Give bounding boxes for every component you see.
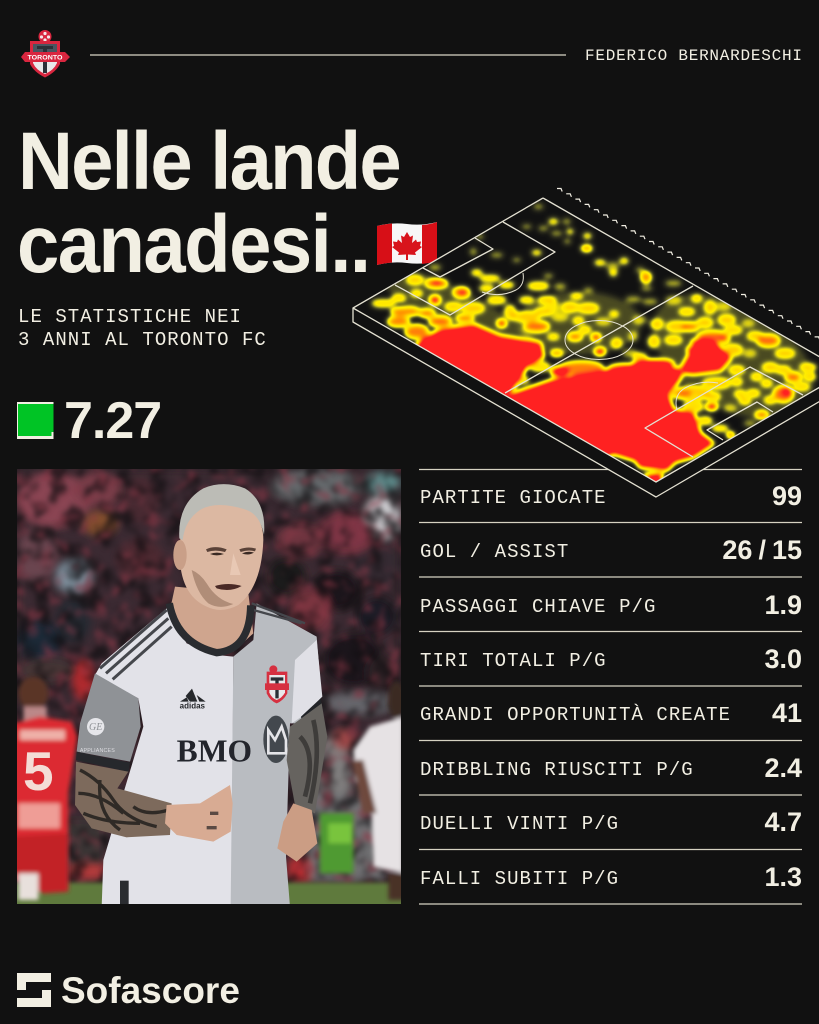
photo: background player in red — [13, 677, 77, 900]
player photo — [13, 467, 407, 909]
stat row: tiri totali: 3.0 — [764, 644, 802, 674]
subtitle: 3 ANNI AL TORONTO FC — [18, 329, 267, 351]
stat row: partite giocate: PARTITE GIOCATE — [420, 487, 607, 509]
title: canadesi.. — [17, 197, 369, 290]
stat row: tiri totali — [419, 644, 802, 686]
photo: player left arm — [75, 762, 233, 842]
text: shirt number: 5 — [23, 740, 54, 802]
stat row: duelli vinti: 4.7 — [764, 807, 802, 837]
stat row: passaggi chiave: PASSAGGI CHIAVE P/G — [420, 596, 656, 618]
Sofascore wordmark: Sofascore — [61, 970, 240, 1011]
stat row: partite giocate: 99 — [772, 481, 802, 511]
text: BMO sponsor: BMO — [177, 732, 252, 768]
stat row: passaggi chiave: 1.9 — [764, 590, 802, 620]
photo: player right arm — [277, 703, 327, 862]
icon: Toronto FC crest: TORONTO — [28, 54, 62, 62]
stats table — [419, 470, 802, 904]
stat row: partite giocate — [419, 481, 802, 522]
subtitle: LE STATISTICHE NEI — [18, 306, 242, 328]
tick marks along pitch edge — [557, 188, 819, 340]
stat row: tiri totali: TIRI TOTALI P/G — [420, 650, 607, 672]
icon: GE sleeve badge — [80, 718, 115, 754]
icon: Canadian flag — [377, 222, 437, 265]
icon: Toronto FC crest — [21, 30, 70, 78]
stat row: grandi opportunita: GRANDI OPPORTUNITÀ CREATE — [420, 704, 731, 726]
subtitle — [18, 306, 267, 351]
header rule — [90, 54, 566, 56]
stat row: falli subiti — [419, 862, 802, 904]
icon: GE sleeve badge: GE — [89, 722, 102, 733]
pitch lines — [353, 198, 819, 497]
title: Nelle lande — [18, 114, 400, 207]
photo: jersey — [76, 603, 323, 907]
icon: adidas logo — [180, 689, 206, 710]
icon: adidas logo: adidas — [180, 701, 206, 710]
stat row: gol / assist: 26/15 — [722, 535, 802, 565]
photo: player neck and head — [170, 484, 264, 652]
stat row: dribbling — [419, 753, 802, 795]
stat row: dribbling: DRIBBLING RIUSCITI P/G — [420, 759, 694, 781]
stat row: passaggi chiave — [419, 590, 802, 632]
stat row: gol / assist: GOL / ASSIST — [420, 541, 569, 563]
stat row: duelli vinti — [419, 807, 802, 850]
stat row: dribbling: 2.4 — [764, 753, 802, 783]
stat row: falli subiti: FALLI SUBITI P/G — [420, 868, 619, 890]
icon: jersey crest — [265, 665, 289, 703]
photo: background player in white — [352, 682, 405, 900]
rating badge — [17, 402, 54, 439]
icon: Sofascore mark — [17, 973, 51, 1007]
heatmap — [371, 206, 819, 485]
pitch slab — [353, 198, 819, 497]
icon: BMO roundel — [263, 716, 289, 763]
photo background: crowd — [13, 467, 407, 904]
stat row: grandi opportunita: 41 — [772, 698, 802, 728]
stat row: grandi opportunita — [419, 698, 802, 740]
title — [17, 114, 400, 290]
stat row: duelli vinti: DUELLI VINTI P/G — [420, 813, 619, 835]
icon: GE sleeve badge: APPLIANCES — [80, 748, 115, 754]
rating value: 7.27 — [64, 392, 161, 450]
stat row: gol / assist — [419, 535, 802, 577]
player name: FEDERICO BERNARDESCHI — [585, 47, 802, 65]
stat row: falli subiti: 1.3 — [764, 862, 802, 892]
isometric heatmap pitch — [353, 188, 819, 497]
photo background: grass — [13, 813, 407, 909]
